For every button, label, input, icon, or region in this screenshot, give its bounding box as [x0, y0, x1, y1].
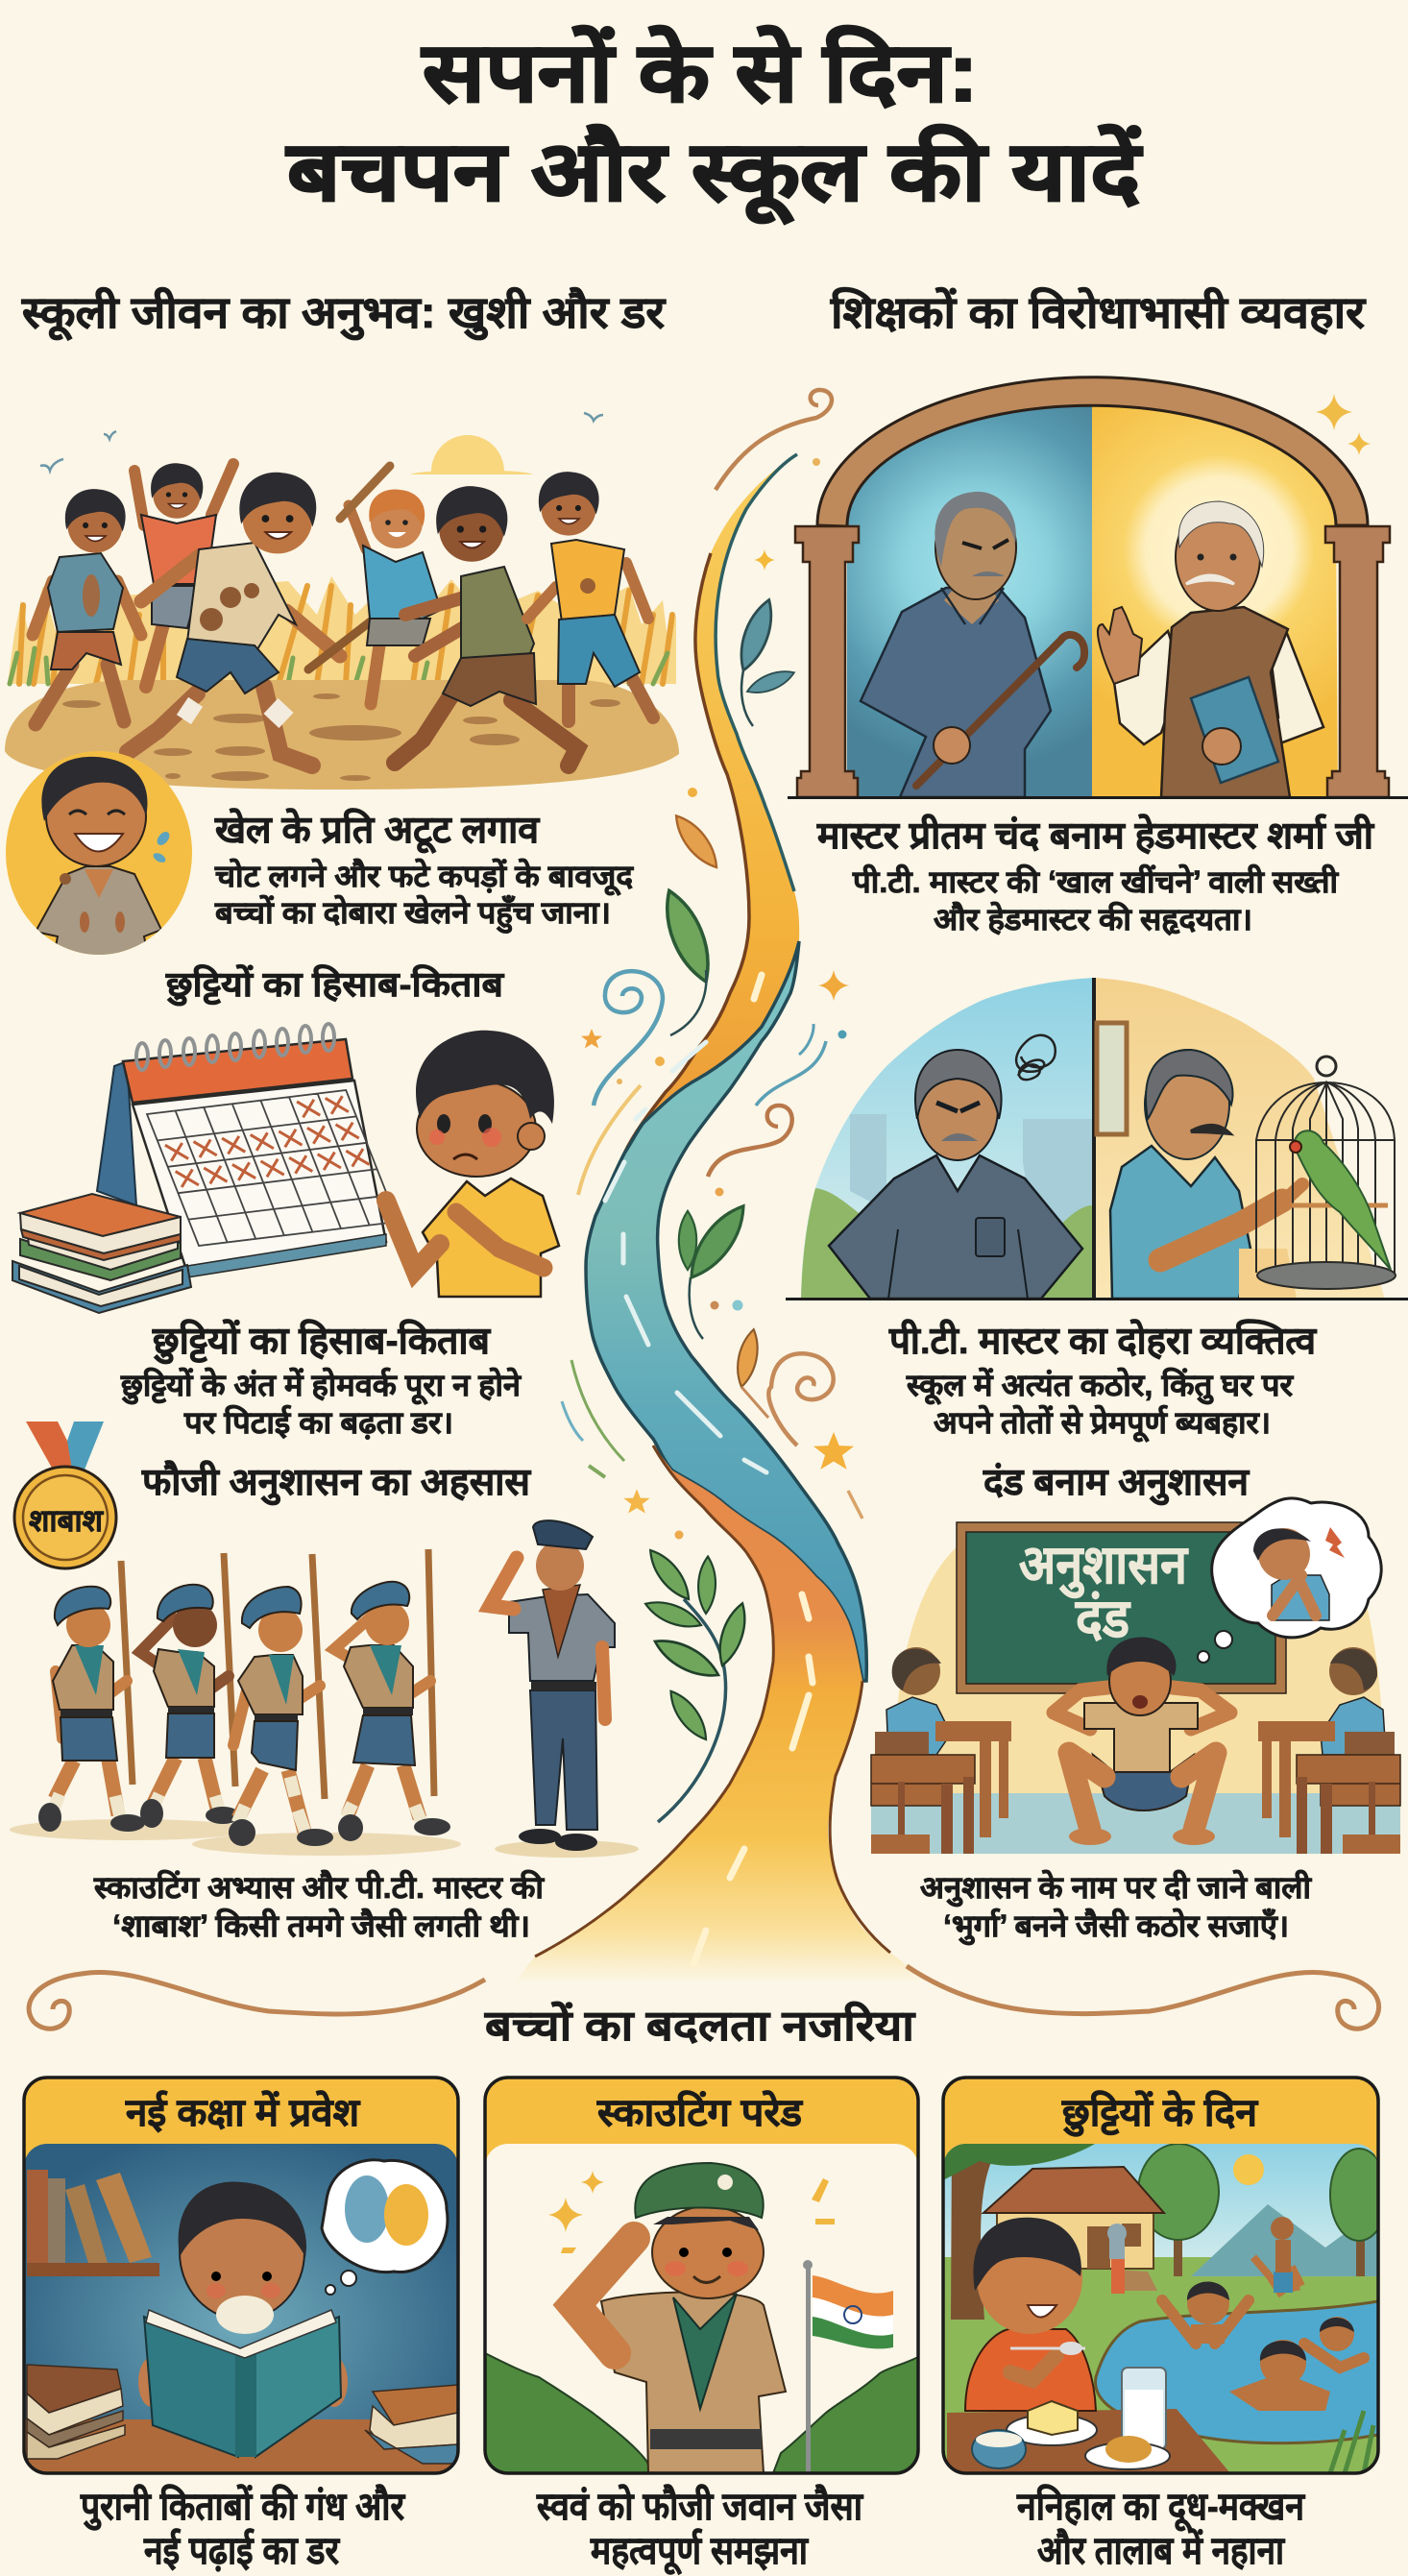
reeds at the pond edge	[1330, 2411, 1373, 2473]
kid in yellow shirt	[527, 472, 653, 721]
trees	[1138, 2144, 1388, 2276]
scribble of anger	[1016, 1035, 1056, 1080]
caption: new class: नई पढ़ाई का डर	[143, 2528, 340, 2572]
chalkboard	[957, 1522, 1286, 1693]
chalkboard: दंड	[1075, 1588, 1131, 1648]
bushes	[485, 2353, 653, 2473]
text: holiday homework fear	[120, 1319, 522, 1440]
icon: medal shabash	[14, 1422, 116, 1568]
right stone pillar	[1325, 526, 1390, 797]
kind headmaster	[1098, 501, 1323, 797]
sparkles beside the arch	[1316, 394, 1371, 455]
text: double personality: स्कूल में अत्यंत कठोर, किंतु घर पर	[906, 1367, 1295, 1405]
title: सपनों के से दिन:	[421, 25, 979, 119]
text: love of games	[214, 808, 634, 934]
kid in light blue shirt	[340, 466, 441, 704]
worried boy	[386, 1031, 559, 1297]
caption: feeling like a soldier: स्ववं को फौजी जवान जैसा	[536, 2484, 863, 2528]
scout boy saluting	[574, 2163, 786, 2473]
kid in blue shirt	[33, 489, 141, 724]
wheat field	[8, 576, 676, 684]
right students and desks	[1258, 1647, 1400, 1854]
text: teachers compared: पी.टी. मास्टर की ‘खाल खींचने’ वाली सख्ती	[852, 863, 1340, 899]
stack of books	[12, 1194, 191, 1313]
heading: holiday accounting (top): छुट्टियों का हिसाब-किताब	[165, 964, 505, 1007]
thought bubble	[1198, 1498, 1381, 1663]
caption: feeling like a soldier	[536, 2484, 863, 2575]
caption: village holidays: ननिहाल का दूध-मक्खन	[1016, 2484, 1306, 2532]
chalkboard: अनुशासन	[1019, 1534, 1189, 1598]
reading boy	[138, 2182, 348, 2457]
text: holiday homework fear: पर पिटाई का बढ़ता डर।	[183, 1404, 453, 1440]
card title: स्काउटिंग परेड	[596, 2090, 804, 2134]
tree trunk	[951, 2144, 991, 2320]
text: holiday homework fear: छुट्टियों के अंत में होमवर्क पूरा न होने	[120, 1367, 522, 1405]
heading: left column: स्कूली जीवन का अनुभव: खुशी और डर	[21, 287, 667, 341]
gentle man at home	[1110, 1050, 1302, 1299]
text: teachers compared: और हेडमास्टर की सहृदयता।	[934, 901, 1252, 936]
caption: village holidays: और तालाब में नहाना	[1037, 2528, 1285, 2572]
river decorations: swirls, leaves and stars	[562, 390, 862, 1822]
river of memories	[514, 454, 927, 1983]
heading: punishment vs discipline: दंड बनाम अनुशासन	[983, 1462, 1250, 1506]
title: बचपन और स्कूल की यादें	[285, 124, 1143, 225]
heading: military discipline: फौजी अनुशासन का अहसास	[141, 1460, 532, 1506]
grandmother figure	[1107, 2224, 1127, 2294]
text: love of games: खेल के प्रति अटूट लगाव	[214, 808, 540, 854]
panel: entering a new class	[24, 2078, 458, 2477]
text: love of games: बच्चों का दोबारा खेलने पहुँच जाना।	[214, 894, 611, 934]
sparkles	[548, 2171, 835, 2253]
pond	[1096, 2301, 1378, 2443]
panel: holiday days	[943, 2078, 1388, 2473]
main kid with torn shirt	[128, 473, 388, 766]
left students and desks	[871, 1647, 1011, 1854]
illustration: scouts marching	[10, 1520, 639, 1858]
text: scouting practice: ‘शाबाश’ किसी तमगे जैसी लगती थी।	[112, 1908, 530, 1943]
caption: feeling like a soldier: महत्वपूर्ण समझना	[590, 2528, 809, 2575]
card title: नई कक्षा में प्रवेश	[125, 2090, 361, 2134]
panel: children playing	[5, 413, 679, 790]
scout 3 with bandaged knee	[229, 1554, 333, 1846]
flourish right	[907, 1966, 1379, 2029]
house	[983, 2167, 1164, 2269]
caption: new class: पुरानी किताबों की गंध और	[80, 2484, 405, 2531]
text: double personality: अपने तोतों से प्रेमपूर्ण ब्यबहार।	[934, 1404, 1271, 1443]
text: scouting practice	[93, 1869, 546, 1943]
text: scouting practice: स्काउटिंग अभ्यास और पी.टी. मास्टर की	[93, 1869, 546, 1905]
icon: medal shabash: शाबाश	[29, 1503, 104, 1538]
text: teachers compared: मास्टर प्रीतम चंद बनाम हेडमास्टर शर्मा जी	[816, 814, 1375, 857]
scout 1	[38, 1561, 145, 1832]
illustration: PT master's two sides	[786, 978, 1408, 1300]
flag on a pole	[803, 2260, 893, 2474]
sun and mountain	[1233, 2154, 1264, 2185]
strict teacher	[861, 492, 1084, 797]
flourish left	[29, 1972, 485, 2029]
text: holiday homework fear: छुट्टियों का हिसाब-किताब	[152, 1319, 492, 1365]
punished boy squatting	[1054, 1637, 1230, 1845]
kid in olive shirt	[395, 486, 577, 766]
heading: changing perspective: बच्चों का बदलता नजरिया	[484, 2001, 916, 2050]
illustration: calendar, books and worried boy	[12, 1024, 559, 1313]
text: love of games: चोट लगने और फटे कपड़ों के बावजूद	[214, 858, 634, 896]
butter, milk and food	[972, 2368, 1170, 2469]
happy boy eating	[965, 2218, 1096, 2411]
title	[285, 25, 1143, 225]
stern man at school	[829, 1050, 1082, 1299]
caption: village holidays	[1016, 2484, 1306, 2572]
left stone pillar	[795, 526, 859, 797]
text: double personality: पी.टी. मास्टर का दोहरा व्यक्तित्व	[888, 1319, 1317, 1362]
heading: right column: शिक्षकों का विरोधाभासी व्यवहार	[830, 287, 1367, 337]
book shelf	[27, 2170, 159, 2276]
illustration: classroom punishment	[871, 1498, 1400, 1854]
sun and birds	[410, 435, 533, 474]
thought bubble with two faces	[322, 2160, 448, 2295]
panel: scouting parade	[485, 2078, 918, 2474]
scout 2	[140, 1553, 240, 1828]
text: teachers compared	[816, 814, 1375, 936]
caption: new class	[80, 2484, 405, 2572]
table	[947, 2409, 1230, 2473]
scout 4	[334, 1549, 450, 1841]
kid in orange shirt	[134, 463, 233, 687]
text: double personality	[888, 1319, 1317, 1443]
swimmers	[1162, 2217, 1364, 2411]
panel: two teachers under an arch	[788, 377, 1408, 799]
card title: छुट्टियों के दिन	[1061, 2090, 1259, 2137]
book stacks	[27, 2365, 458, 2464]
icon: laughing injured boy	[6, 751, 192, 960]
PT master officer saluting	[490, 1520, 639, 1858]
wall calendar	[97, 1024, 398, 1277]
dusty ground	[5, 680, 679, 790]
bird cage with parrot	[1256, 1057, 1396, 1289]
text: murga punishment: अनुशासन के नाम पर दी जाने बाली	[920, 1869, 1313, 1908]
text: murga punishment: ‘भुर्गा’ बनने जैसी कठोर सजाएँ।	[943, 1908, 1289, 1946]
text: murga punishment	[920, 1869, 1313, 1946]
